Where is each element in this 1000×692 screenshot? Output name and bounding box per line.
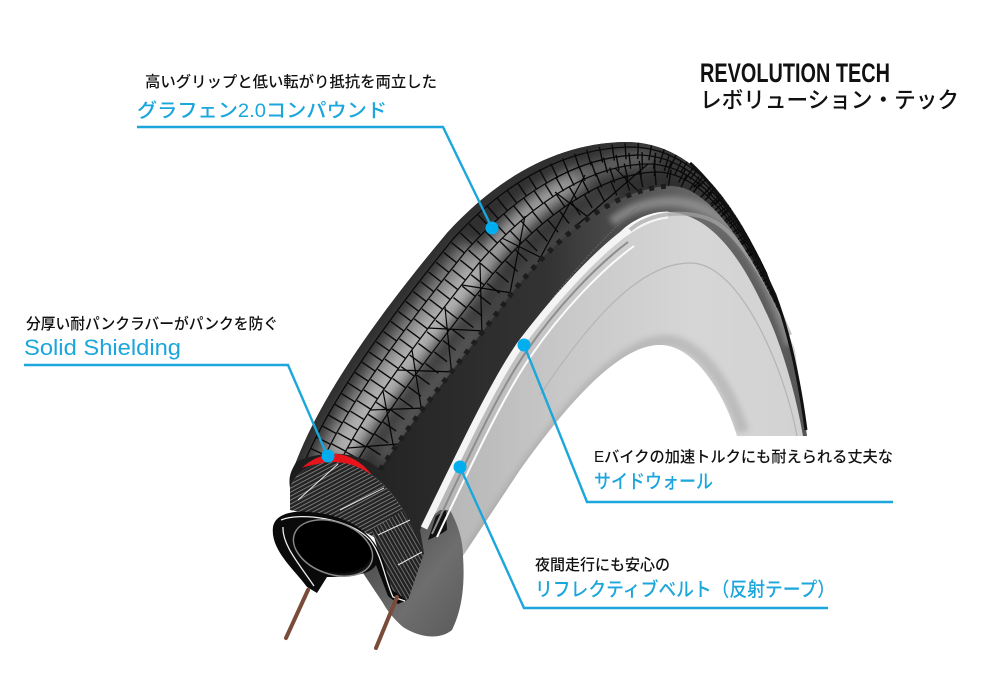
tube opening xyxy=(286,510,380,586)
carcass xyxy=(290,462,424,600)
hole mask xyxy=(463,345,760,660)
white liner xyxy=(281,517,405,601)
label: solid shielding: Solid Shielding xyxy=(24,335,181,360)
label: sidewall: サイドウォール xyxy=(594,471,713,493)
callout line: solid shielding xyxy=(24,365,334,462)
carcass seam lines xyxy=(298,464,422,565)
tread transverse grooves xyxy=(313,151,781,468)
casing crease line xyxy=(540,263,797,436)
label: reflective belt xyxy=(535,556,835,601)
label: solid shielding xyxy=(24,314,278,360)
carcass lower weave xyxy=(372,510,424,600)
reflective belt xyxy=(424,214,790,537)
sidewall stitching xyxy=(432,205,640,508)
tread highlight xyxy=(321,158,725,464)
tread xyxy=(296,142,781,468)
label: graphene compound: 高いグリップと低い転がり抵抗を両立した xyxy=(145,72,437,91)
red solid shielding layer xyxy=(302,454,372,475)
tire illustration xyxy=(273,130,810,660)
callout line: compound xyxy=(137,127,498,234)
tire outer shape xyxy=(289,142,807,553)
section notch xyxy=(428,510,447,540)
callout line: sidewall xyxy=(518,338,893,502)
label: graphene compound xyxy=(137,72,437,122)
callout line: reflective belt xyxy=(454,460,828,608)
label: reflective belt: リフレクティブベルト（反射テープ） xyxy=(535,578,835,601)
right shoulder teeth xyxy=(690,163,806,430)
title: レボリューション・テック xyxy=(700,88,959,113)
tread shoulder teeth xyxy=(380,186,670,470)
label: solid shielding: 分厚い耐パンクラバーがパンクを防ぐ xyxy=(26,314,278,333)
label: graphene compound: グラフェン2.0コンパウンド xyxy=(137,100,387,122)
label: sidewall: Eバイクの加速トルクにも耐えられる丈夫な xyxy=(594,448,893,466)
bead wires xyxy=(286,590,397,648)
sidewall highlight xyxy=(612,202,790,345)
shaded inner edge xyxy=(469,341,743,552)
tire casing body xyxy=(430,212,807,560)
label: reflective belt: 夜間走行にも安心の xyxy=(535,556,670,574)
casing section xyxy=(363,510,464,636)
tread longitudinal grooves xyxy=(304,147,779,467)
rolled inner layer xyxy=(273,510,407,604)
tread diamond net xyxy=(348,164,648,449)
label: sidewall xyxy=(594,448,893,493)
title: REVOLUTION TECH xyxy=(700,58,890,88)
title xyxy=(700,58,959,113)
